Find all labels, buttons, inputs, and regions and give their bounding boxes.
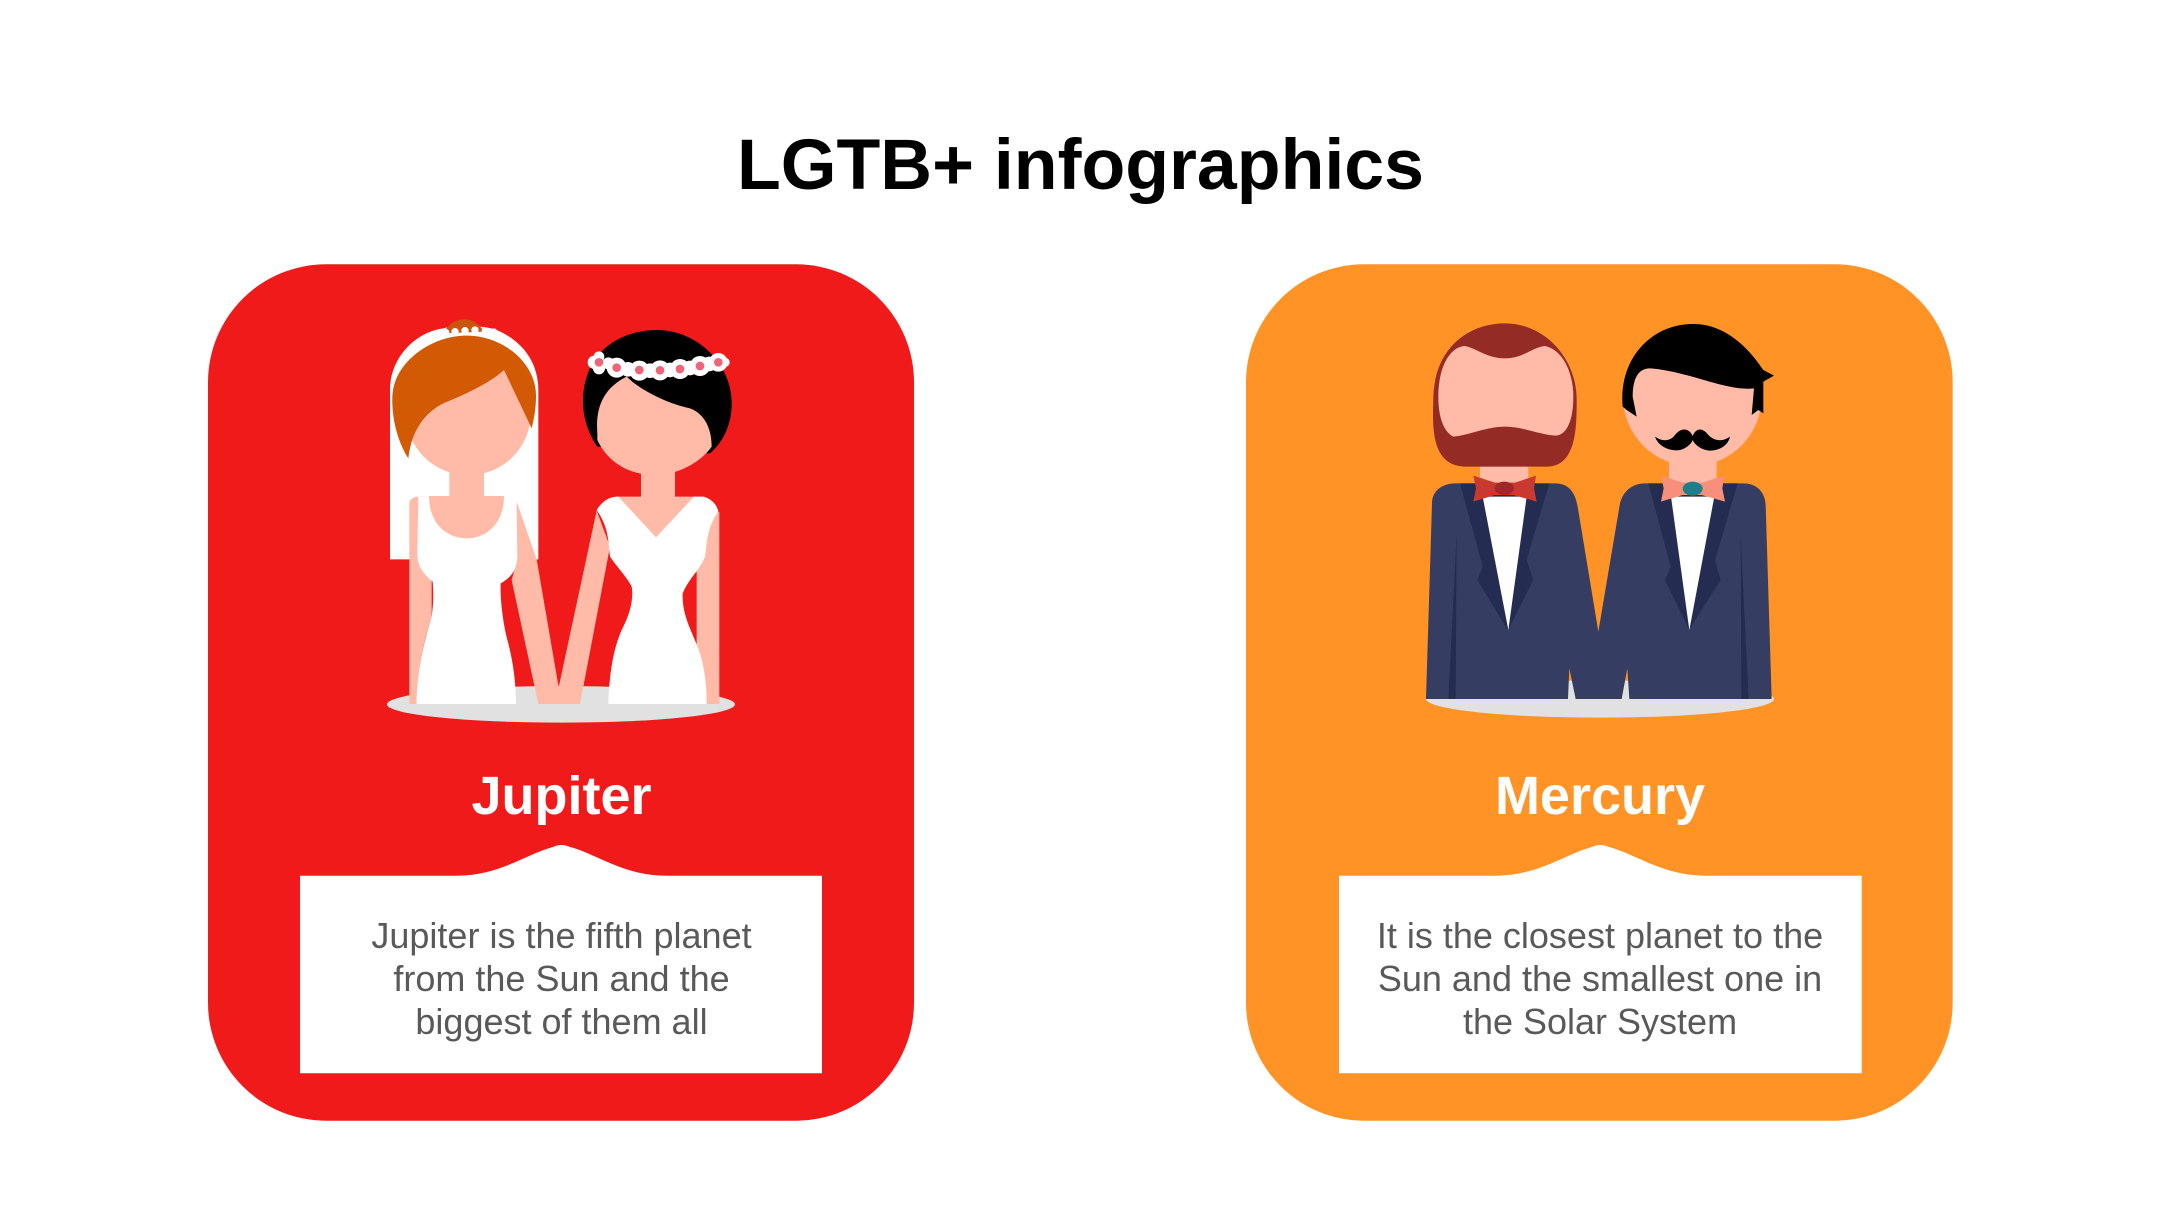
- heading: Jupiter: Jupiter: [471, 766, 652, 826]
- callout: Mercury: [1339, 845, 1862, 1073]
- panel: Mercury: [1246, 264, 1953, 1121]
- callout: Jupiter: [300, 845, 822, 1073]
- heading: Mercury: Mercury: [1495, 766, 1705, 826]
- callout: Mercury: the Solar System: [1463, 1001, 1737, 1042]
- callout: Mercury: It is the closest planet to the: [1377, 915, 1823, 956]
- callout: Jupiter: Jupiter is the fifth planet: [371, 915, 752, 956]
- callout: Mercury: Sun and the smallest one in: [1378, 958, 1822, 999]
- title: LGTB+ infographics: [737, 125, 1424, 205]
- callout: Jupiter: from the Sun and the: [393, 958, 730, 999]
- callout: Jupiter: biggest of them all: [415, 1001, 708, 1042]
- icon: two brides: [387, 319, 735, 723]
- panel: Jupiter: [208, 264, 914, 1121]
- icon: two grooms: [1426, 323, 1774, 718]
